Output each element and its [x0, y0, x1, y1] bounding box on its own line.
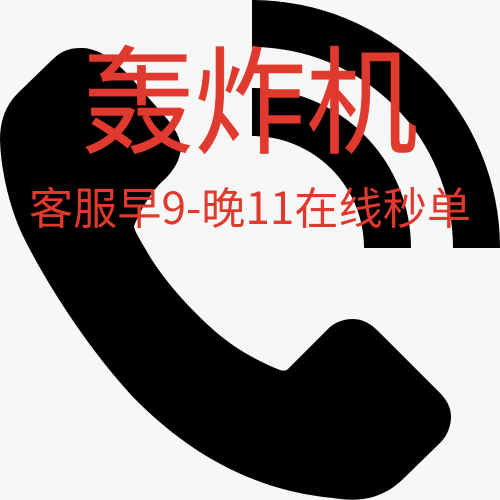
icon: inner signal arc — [252, 88, 411, 248]
title: 轰炸机 — [82, 8, 418, 178]
subtitle: 客服早9-晚11在线秒单 — [29, 173, 471, 237]
icon: outer signal arc — [252, 0, 500, 248]
